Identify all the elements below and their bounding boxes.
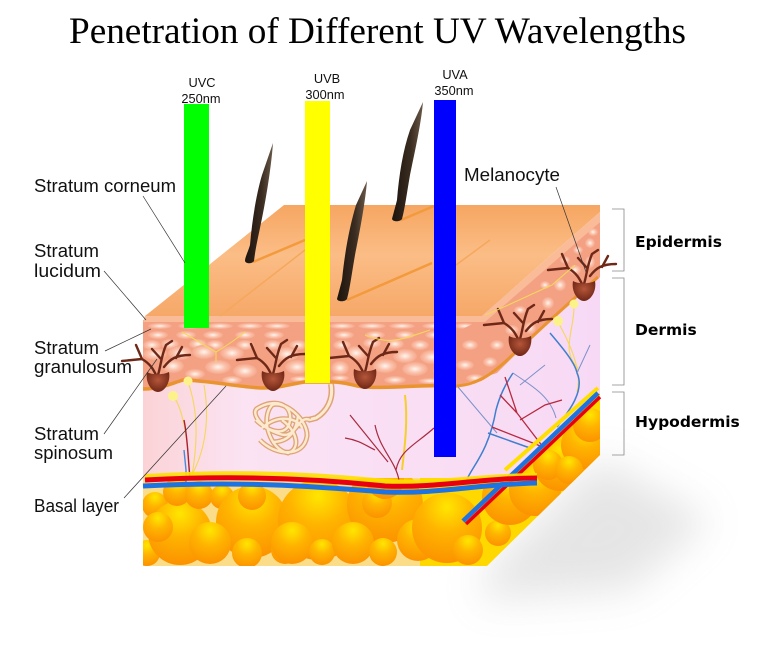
label: Stratum granulosum: granulosum [34,357,132,377]
UVC bar: 250nm [181,91,221,106]
label: Stratum corneum [34,176,185,263]
UVB bar [305,71,345,383]
label: Stratum granulosum [34,329,151,377]
label: Melanocyte: Melanocyte [464,165,560,185]
UVA bar [434,67,474,457]
label: Stratum corneum: Stratum corneum [34,176,176,196]
skin block illustration [122,102,616,568]
skin surface top face [143,205,600,322]
UVC bar [181,75,221,328]
dermis layer [143,270,600,478]
title: Penetration of Different UV Wavelengths [69,11,686,52]
label: Basal layer: Basal layer [34,496,119,516]
bracket: Hypodermis [612,392,740,455]
hypodermis fat layer [134,393,609,568]
epidermis front face [143,320,485,390]
bracket: Epidermis [612,209,722,271]
UVB bar: 300nm [305,87,345,102]
melanocytes [122,250,616,392]
UVC bar: UVC [188,75,216,90]
epidermis side face [440,222,600,386]
block drop shadow [480,458,710,600]
bracket: Dermis: Dermis [635,321,697,339]
bracket: Epidermis: Epidermis [635,233,722,251]
nerve endings [168,265,578,476]
label: Stratum spinosum [34,359,157,463]
hair strands [245,102,423,301]
label: Stratum lucidum: lucidum [34,261,101,281]
UVA bar: UVA [442,67,468,82]
label: Basal layer [34,386,226,516]
label: Stratum spinosum: spinosum [34,443,113,463]
capillaries [184,333,590,486]
UVA bar: 350nm [434,83,474,98]
bracket: Hypodermis: Hypodermis [635,413,740,431]
label: Melanocyte [464,165,586,272]
label: Stratum lucidum [34,241,146,320]
sweat gland [255,384,332,453]
main blood vessels [143,388,600,524]
label: Stratum granulosum: Stratum [34,338,99,358]
label: Stratum lucidum: Stratum [34,241,99,261]
UVB bar: UVB [314,71,340,86]
bracket: Dermis [612,278,697,385]
label: Stratum spinosum: Stratum [34,424,99,444]
